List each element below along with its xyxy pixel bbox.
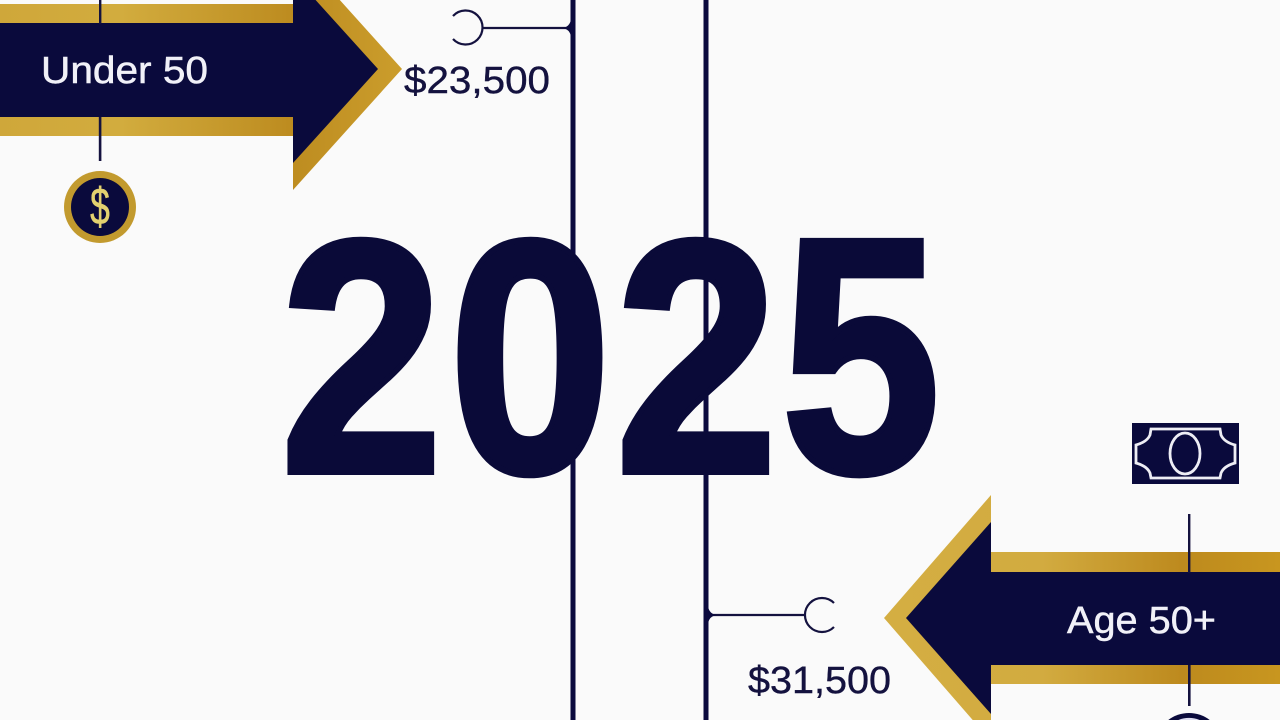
- heading: 2025: 2: [615, 172, 778, 543]
- heading: 2025: [280, 169, 941, 544]
- connector stem: Under 50 bottom: [99, 117, 101, 161]
- arrow: Age 50+: [884, 495, 1280, 720]
- icon: banknote: [1132, 423, 1239, 484]
- arrow label: Under 50: Under 50: [41, 50, 208, 92]
- heading: 2025: 5: [781, 169, 941, 544]
- connector: Age 50+ limit to rail: [708, 598, 834, 632]
- connector stem: Age 50+ top: [1188, 514, 1190, 573]
- heading: 2025: 0: [449, 172, 612, 543]
- connector: Under 50 limit to rail: [453, 10, 571, 45]
- vertical timeline rail: left: [570, 0, 576, 720]
- arrow: Under 50: [0, 0, 402, 190]
- amount: $31,500: $31,500: [748, 660, 891, 702]
- heading: 2025: 2: [280, 172, 443, 543]
- arrow label: Age 50+: Age 50+: [1067, 600, 1216, 642]
- icon: dollar coin: [64, 171, 136, 243]
- vertical timeline rail: right: [704, 0, 708, 720]
- icon: dollar coin: $: [90, 178, 110, 236]
- amount: $23,500: $23,500: [404, 60, 550, 102]
- icon: coin, cropped at lower edge: [1168, 713, 1210, 720]
- connector stem: Under 50 top: [99, 0, 101, 24]
- connector stem: Age 50+ bottom: [1188, 665, 1191, 706]
